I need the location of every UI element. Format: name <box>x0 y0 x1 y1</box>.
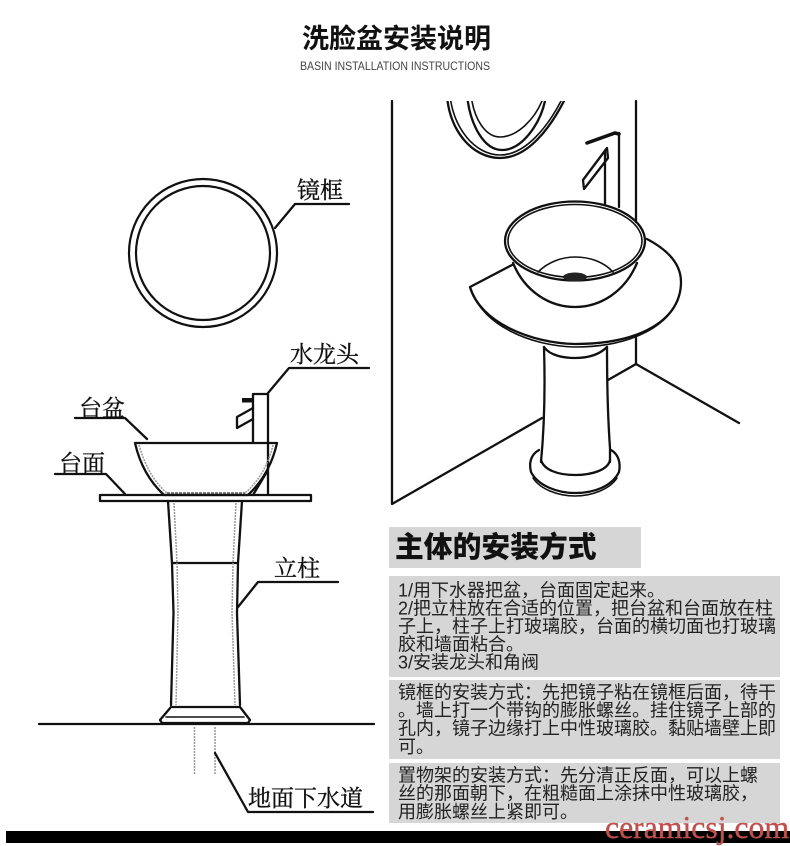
label: column: 立柱 <box>274 556 320 581</box>
pedestal column <box>160 501 250 723</box>
floor line <box>39 723 374 725</box>
panel: mirror frame installation: 镜框的安装方式：先把镜子粘在镜框后面，待干 <box>398 682 776 702</box>
label: faucet: 水龙头 <box>290 342 360 367</box>
label: mirror frame <box>275 178 349 228</box>
heading panel <box>389 527 641 568</box>
diagram: mirror frame <box>129 178 349 327</box>
faucet <box>583 133 619 207</box>
panel: main installation steps: 1/用下水器把盆，台面固定起来。 <box>398 580 665 600</box>
label: countertop: 台面 <box>59 451 105 476</box>
footer bar <box>6 831 790 843</box>
panel: main installation steps: 3/安装龙头和角阀 <box>398 652 539 672</box>
basin bowl <box>135 443 277 495</box>
faucet <box>237 394 268 495</box>
diagram: basin side elevation <box>39 394 374 775</box>
countertop <box>470 239 681 344</box>
drain pipe <box>194 727 215 775</box>
panel: shelf installation: 用膨胀螺丝上紧即可。 <box>398 802 578 822</box>
panel: mirror frame installation: 孔内，镜子边缘打上中性玻璃胶。黏贴墙壁上即 <box>398 718 776 738</box>
countertop <box>100 495 311 501</box>
panel: main installation steps: 2/把立柱放在合适的位置，把台盆和台面放在柱 <box>398 598 773 618</box>
wall mirror <box>447 95 564 158</box>
panel: mirror frame installation: 可。 <box>398 737 434 757</box>
label: countertop <box>55 451 125 494</box>
label: floor drain: 地面下水道 <box>248 786 363 811</box>
panel: main installation steps: 子上，柱子上打玻璃胶，台面的横切面也打玻璃 <box>398 616 776 636</box>
panel: shelf installation: 置物架的安装方式：先分清正反面，可以上螺 <box>398 766 758 786</box>
diagram: basin perspective view <box>392 95 739 504</box>
label: basin <box>75 396 147 439</box>
basin bowl <box>505 202 645 307</box>
pedestal <box>530 347 620 496</box>
label: mirror frame: 镜框 <box>297 178 343 203</box>
label: column <box>238 556 338 607</box>
label: faucet <box>268 342 369 393</box>
panel: mirror frame installation: 。墙上打一个带钩的膨胀螺丝。挂住镜子上部的 <box>398 700 776 720</box>
panel: mirror frame installation <box>389 680 780 759</box>
watermark: ceramicsj.com <box>605 809 789 845</box>
subtitle: BASIN INSTALLATION INSTRUCTIONS <box>300 61 490 73</box>
label: floor drain <box>215 753 373 812</box>
label: basin: 台盆 <box>79 396 125 421</box>
panel: main installation steps: 胶和墙面粘合。 <box>398 634 524 654</box>
panel: shelf installation <box>389 763 780 823</box>
title: 洗脸盆安装说明 <box>302 24 491 54</box>
walls and floor <box>392 101 739 504</box>
heading panel: 主体的安装方式 <box>395 531 597 564</box>
panel: main installation steps <box>389 576 780 677</box>
panel: shelf installation: 丝的那面朝下，在粗糙面上涂抹中性玻璃胶， <box>398 784 758 804</box>
